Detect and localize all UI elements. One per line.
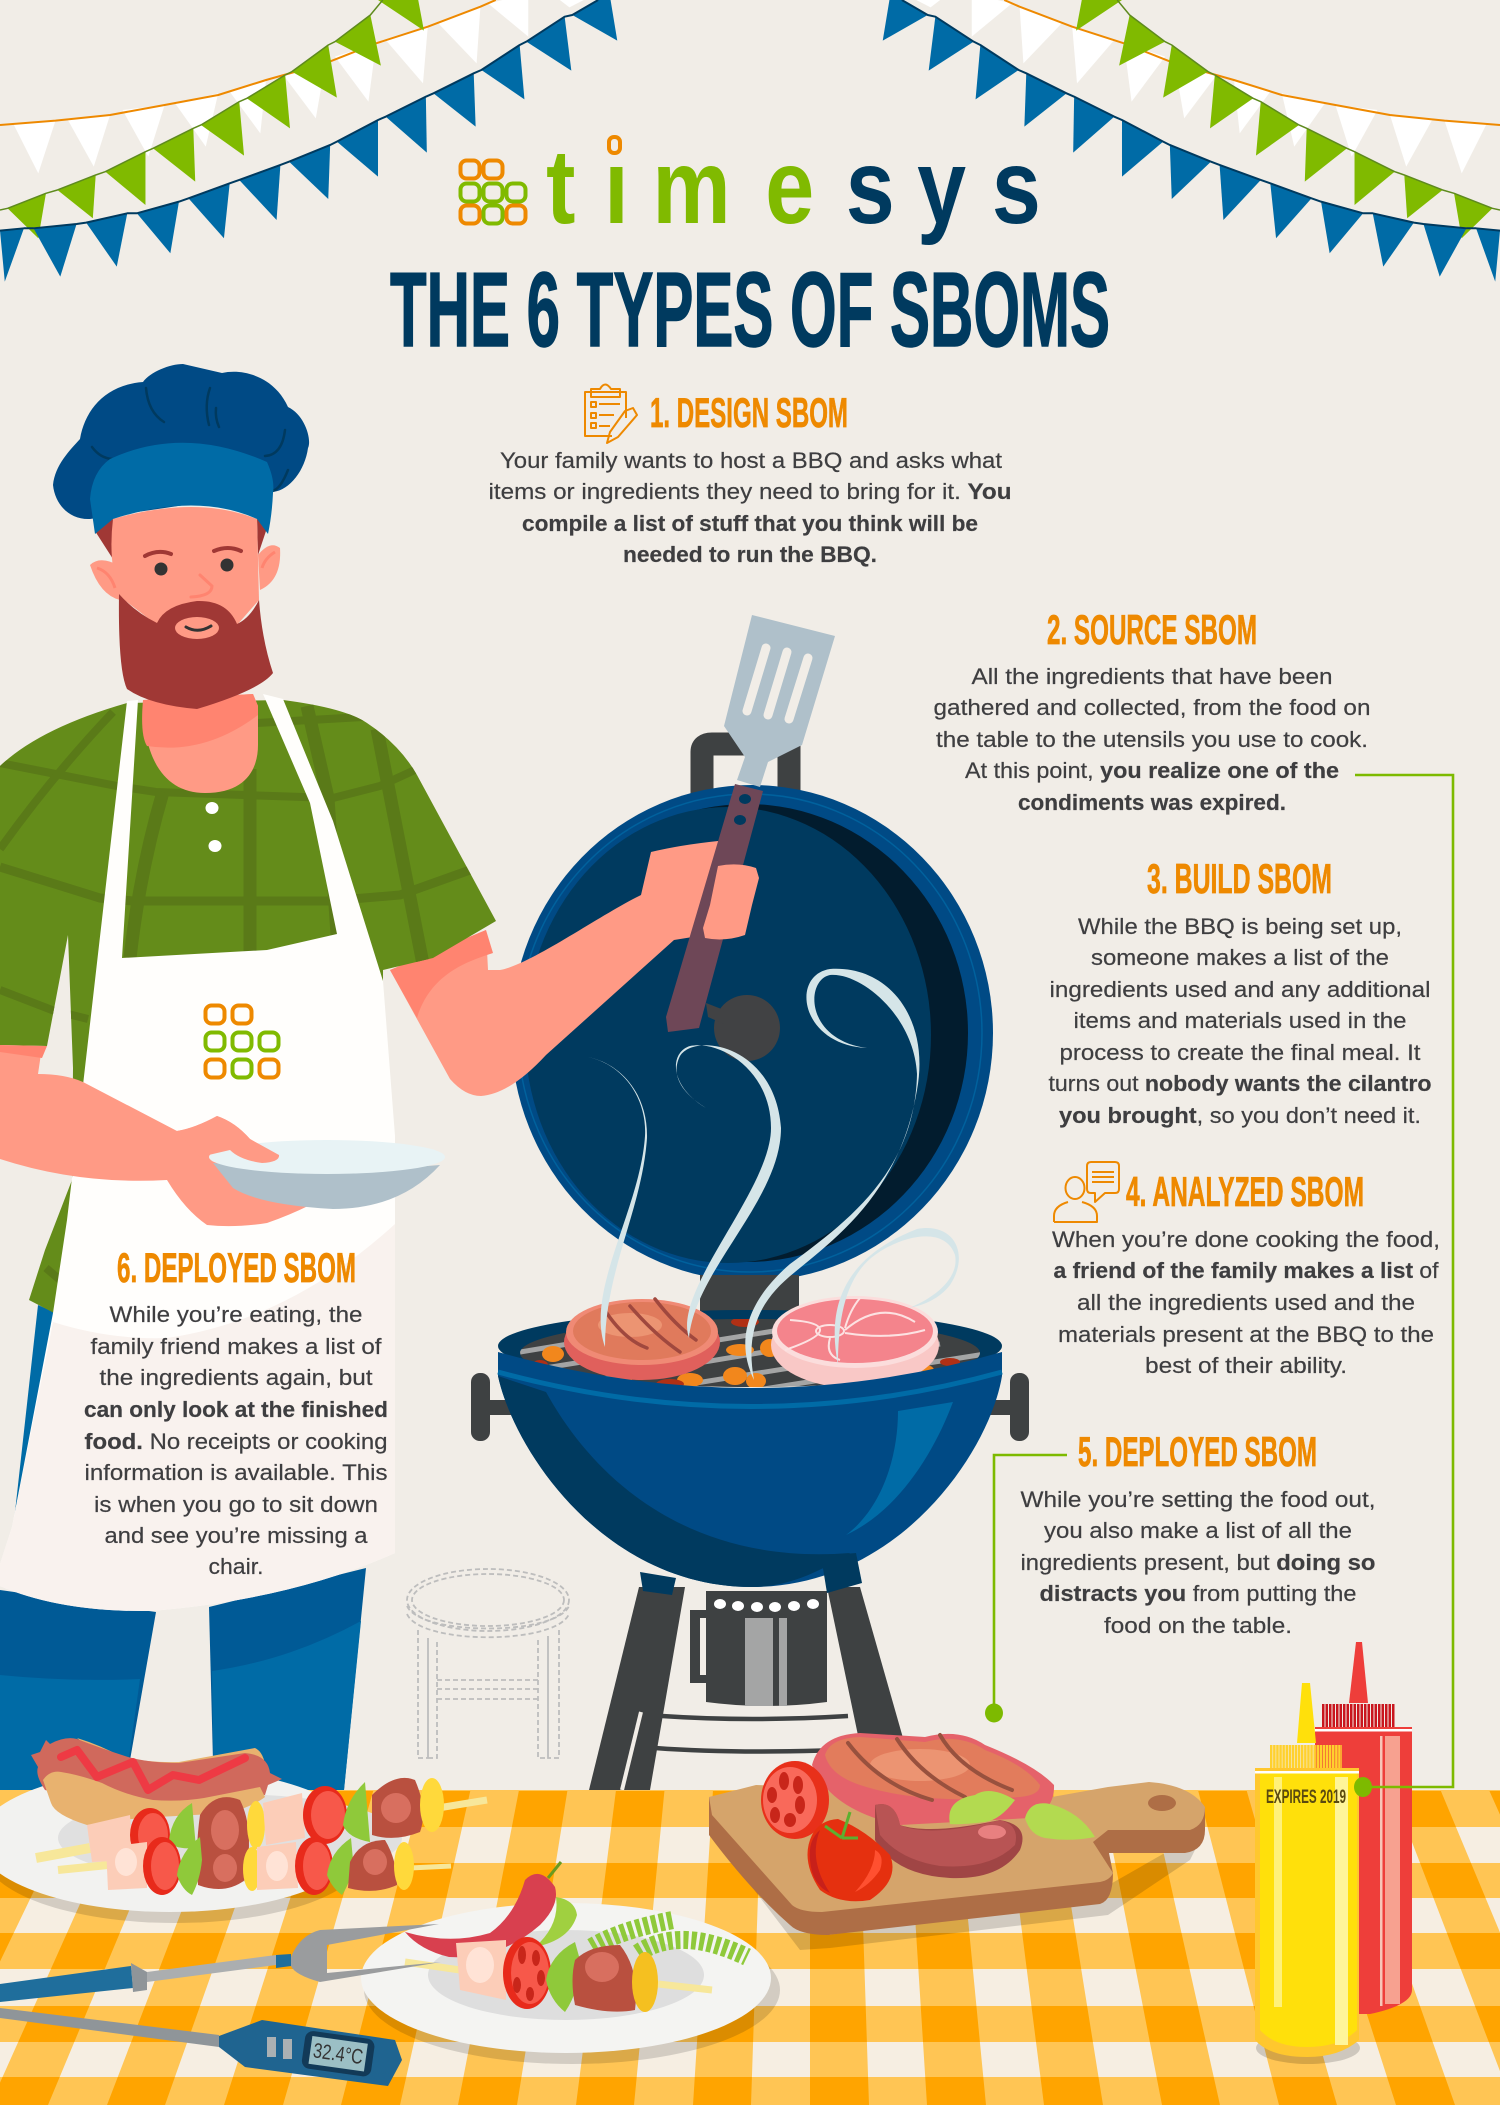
sausage (875, 1804, 1022, 1878)
fork handle (0, 1966, 133, 2002)
steak on board (812, 1733, 1054, 1825)
grill legs (589, 1587, 905, 1790)
board hole (1148, 1795, 1176, 1811)
heading: 1. DESIGN SBOM (650, 389, 848, 436)
icon: clipboard and pencil (585, 384, 637, 443)
body text: someone makes a list of the (1091, 945, 1389, 970)
logo: timesys (460, 127, 1041, 246)
chef head (90, 443, 280, 709)
grill bowl (498, 1352, 1002, 1587)
body text: food. No receipts or cooking (84, 1429, 388, 1454)
fist on handle (703, 864, 759, 939)
hot dog (31, 1738, 282, 1825)
spatula (666, 615, 835, 1032)
eyebrows (145, 548, 241, 556)
body text: compile a list of stuff that you think will be (522, 511, 978, 536)
bunting left (0, 0, 617, 282)
plate (0, 1768, 362, 1912)
plate (361, 1903, 771, 2053)
smoke curls (588, 969, 959, 1380)
plate well (428, 1930, 704, 2020)
icon: person with speech bubble (1054, 1162, 1119, 1222)
basil leaves (949, 1791, 1095, 1840)
hair sides (95, 519, 267, 570)
fork collar (131, 1963, 147, 1992)
decorative dashed chair (407, 1569, 569, 1758)
mouth (175, 617, 219, 639)
board shadow (710, 1815, 1205, 1950)
whole tomato (808, 1812, 892, 1901)
section 5: deployed SBOM (1020, 1428, 1376, 1638)
body text: the table to the utensils you use to cook. (936, 727, 1368, 752)
body text: and see you’re missing a (104, 1523, 368, 1548)
apron (0, 694, 395, 1611)
spatula handle (666, 784, 763, 1032)
rosemary (592, 1920, 747, 1957)
body text: is when you go to sit down (94, 1492, 378, 1517)
handle holes (734, 794, 751, 825)
fork tines (291, 1924, 441, 1982)
nose (191, 575, 212, 597)
ash catcher (690, 1591, 827, 1706)
thermometer probe (0, 2008, 219, 2047)
skewer pieces (456, 1937, 658, 2012)
body text (934, 664, 1370, 815)
body text: family friend makes a list of (90, 1334, 382, 1359)
fork shaft (147, 1955, 276, 1982)
body text: items and materials used in the (1074, 1008, 1406, 1033)
board side (709, 1797, 1205, 1935)
section 6: deployed SBOM on apron (84, 1244, 388, 1579)
front skewer (106, 1837, 414, 1895)
body text: gathered and collected, from the food on (934, 695, 1370, 720)
thermometer body (219, 2020, 402, 2086)
heading: 3. BUILD SBOM (1147, 855, 1332, 902)
cutting board with steak, tomato and sausage (709, 1733, 1205, 1950)
body text: process to create the final meal. It (1060, 1040, 1420, 1065)
body text: best of their ability. (1145, 1353, 1347, 1378)
body text: When you’re done cooking the food, (1052, 1227, 1440, 1252)
body text: At this point, you realize one of the (965, 758, 1339, 783)
lid knob (706, 995, 780, 1061)
logo wordmark: time sys (546, 127, 1041, 246)
beard (119, 594, 273, 709)
grate and coals (520, 1319, 980, 1387)
bowl brackets (640, 1553, 862, 1595)
kettle grill (471, 744, 1029, 1790)
body text: you brought , so you don’t need it. (1059, 1103, 1421, 1128)
section 1: design SBOM (488, 384, 1012, 567)
body text (1052, 1227, 1440, 1378)
body text: ingredients used and any additional (1050, 977, 1430, 1002)
body text (1048, 914, 1432, 1128)
grill back rim (498, 1310, 1002, 1382)
bunting right (883, 0, 1500, 282)
body text: a friend of the family makes a list of (1054, 1258, 1439, 1283)
shirt buttons (206, 802, 222, 852)
tomato slice (761, 1761, 829, 1839)
body text (488, 448, 1012, 567)
face (111, 507, 259, 625)
leg rings (655, 1716, 880, 1752)
body text: materials present at the BBQ to the (1058, 1322, 1434, 1347)
display: 32.4°C (312, 2039, 364, 2069)
condiment bottles (1255, 1642, 1412, 2064)
fork neck (276, 1954, 291, 1968)
shirt (0, 700, 496, 1313)
section 4: analyzed SBOM (1052, 1162, 1440, 1378)
chef right arm (390, 841, 723, 1096)
serving plate with skewer (361, 1862, 780, 2064)
body text: information is available. This (84, 1460, 388, 1485)
bottle shadow (1256, 2032, 1360, 2064)
mustard bottle (1255, 1683, 1359, 2057)
ketchup bottle (1315, 1642, 1412, 2014)
left arm and hand (0, 1047, 310, 1226)
lid hinge (700, 1275, 799, 1320)
expiry label: EXPIRES 2019 (1266, 1787, 1346, 1808)
chef (0, 364, 723, 1800)
raw steak on grate (771, 1296, 939, 1388)
body text: While the BBQ is being set up, (1078, 914, 1402, 939)
back skewer (87, 1778, 444, 1889)
ears (90, 545, 280, 600)
plate with hot dog and skewers (0, 1738, 487, 1923)
ketchup (61, 1750, 245, 1790)
logo icon (460, 160, 526, 224)
skewer stick (405, 1962, 712, 1990)
buttons (267, 2037, 292, 2059)
connector: source SBOM to expired condiment (1354, 775, 1453, 1797)
eyes (154, 558, 234, 576)
hat band (90, 443, 273, 534)
connector: deployed SBOM to food on table (985, 1455, 1067, 1722)
apron logo (206, 1006, 278, 1078)
body text: Your family wants to host a BBQ and asks what (500, 448, 1002, 473)
body text: you also make a list of all the (1044, 1518, 1352, 1543)
back bun (77, 1738, 266, 1775)
spatula slots (747, 648, 808, 719)
skewer sticks (36, 1800, 487, 1870)
body text: food on the table. (1104, 1613, 1292, 1638)
plate shadow (0, 1787, 365, 1923)
body text: While you’re setting the food out, (1020, 1487, 1376, 1512)
spatula head (724, 615, 835, 787)
chef trousers (0, 1305, 366, 1800)
heading: 5. DEPLOYED SBOM (1078, 1428, 1317, 1475)
body text: While you’re eating, the (110, 1302, 362, 1327)
body text: distracts you from putting the (1040, 1581, 1356, 1606)
section 3: build SBOM (1048, 855, 1432, 1128)
carving fork (0, 1924, 441, 2002)
front bun (43, 1772, 265, 1825)
body text: the ingredients again, but (100, 1365, 372, 1390)
body text: chair. (208, 1554, 264, 1579)
side handles (471, 1373, 1029, 1441)
red chili (405, 1862, 561, 1957)
body text: condiments was expired. (1018, 790, 1286, 815)
thermometer (0, 2008, 402, 2086)
heading: 2. SOURCE SBOM (1047, 606, 1257, 653)
body text: can only look at the finished (84, 1397, 388, 1422)
green chili (535, 1897, 577, 1947)
table cloth (0, 1790, 1500, 2105)
logo i dot (600, 128, 630, 167)
board top (709, 1782, 1205, 1912)
grill lid (511, 785, 993, 1281)
neck (142, 694, 258, 793)
body text (84, 1302, 388, 1579)
sausage (31, 1738, 282, 1810)
leg slit (622, 1712, 641, 1790)
grill back handle (702, 744, 789, 795)
display (301, 2030, 375, 2077)
body text: turns out nobody wants the cilantro (1048, 1071, 1432, 1096)
heading: 6. DEPLOYED SBOM (117, 1244, 356, 1291)
sleeve cuff shadow (0, 1045, 47, 1058)
plate well (58, 1794, 402, 1882)
thumb (177, 1116, 279, 1163)
body text: all the ingredients used and the (1077, 1290, 1415, 1315)
body text (1020, 1487, 1376, 1638)
section 2: source SBOM (934, 606, 1370, 815)
plate in hand (209, 1140, 445, 1209)
body text: ingredients present, but doing so (1020, 1550, 1376, 1575)
body text: needed to run the BBQ. (623, 542, 877, 567)
shirt plaid (0, 706, 470, 1280)
chef hat (53, 364, 309, 519)
body text: items or ingredients they need to bring for it. You (488, 479, 1012, 504)
plate shadow (364, 1916, 780, 2064)
grilled steak on grate (564, 1299, 720, 1380)
body text: All the ingredients that have been (972, 664, 1332, 689)
